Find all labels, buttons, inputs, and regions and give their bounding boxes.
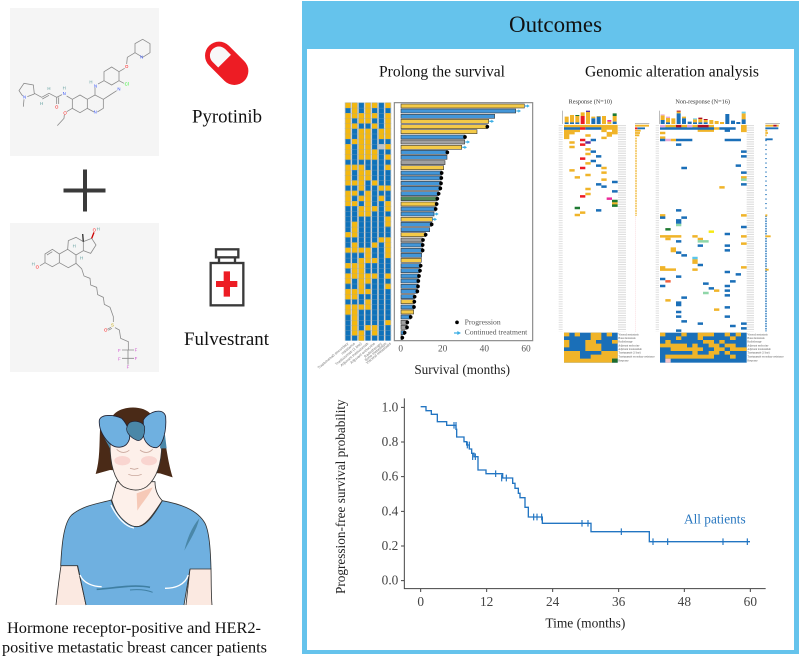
- panel: fulvestrant chemical structure: H: [97, 227, 100, 232]
- panel: fulvestrant chemical structure: F: [135, 356, 138, 361]
- heading: Genomic alteration analysis: Genomic alteration analysis: [585, 64, 759, 80]
- axis title: Survival (months): [414, 362, 510, 377]
- heading: Prolong the survival: Prolong the survival: [379, 64, 505, 80]
- heatmap column labels: resistance: [341, 342, 356, 355]
- chart: Kaplan-Meier progression-free survival: [333, 398, 766, 631]
- panel: pyrotinib chemical structure: N: [94, 110, 97, 115]
- heatmap column labels: Bone metastasis: [364, 342, 387, 362]
- heatmap column labels: Visceral metastasis: [365, 342, 392, 365]
- icon: pill: [199, 36, 254, 91]
- clinical track labels: Adjuvant endocrine: [618, 344, 640, 347]
- heatmap column labels: Adjuvant endocrine: [349, 342, 376, 365]
- clinical track labels: Visceral metastasis: [747, 333, 768, 336]
- response clinical annotation tracks: [564, 333, 618, 363]
- clinical track labels: Trastuzumab (1 line): [618, 352, 641, 355]
- clinical track labels: Visceral metastasis: [618, 333, 639, 336]
- censor marks: [454, 422, 747, 545]
- heatmap column labels: Adjuvant trastuzumab: [340, 342, 369, 368]
- panel: pyrotinib chemical structure: H: [40, 101, 43, 106]
- panel: pyrotinib chemical structure: N: [63, 91, 66, 96]
- x tick labels: 24: [546, 594, 560, 609]
- response mutation frequency: [635, 123, 649, 216]
- y tick labels: 1.0: [382, 399, 399, 414]
- axis tick labels: [398, 344, 531, 354]
- caption: patient population: positive metastatic breast cancer patients: [2, 638, 267, 656]
- panel: fulvestrant chemical structure: F: [135, 347, 138, 352]
- clinical track labels: Adjuvant trastuzumab: [747, 348, 772, 351]
- subheading: Response: Response (N=10): [569, 98, 612, 105]
- panel: pyrotinib chemical structure: N: [117, 87, 120, 92]
- panel: fulvestrant chemical structure: S: [111, 323, 114, 328]
- panel: fulvestrant chemical structure: O: [93, 228, 97, 233]
- legend: Continued treatment: [465, 327, 528, 336]
- heatmap column labels: Radiotherapy: [363, 342, 383, 359]
- clinical track labels: Radiotherapy: [747, 341, 762, 344]
- panel: pyrotinib chemical structure: H: [47, 86, 50, 91]
- panel: fulvestrant chemical structure: F: [118, 357, 121, 362]
- panel: pyrotinib chemical structure: O: [63, 110, 67, 115]
- y tick labels: 0.8: [382, 434, 399, 449]
- placeholder marks for illegible gene labels: [561, 125, 750, 331]
- x tick labels: 0: [417, 594, 424, 609]
- survival curve: [421, 407, 750, 542]
- label: Pyrotinib: Pyrotinib: [192, 106, 262, 128]
- clinical track labels: Response: [747, 359, 758, 362]
- illustration: patient with highlighted reproductive organs: [56, 407, 212, 605]
- non-response mutation matrix: [660, 126, 747, 331]
- clinical track labels: [618, 333, 784, 362]
- clinical track labels: Bone metastasis: [747, 337, 765, 340]
- bars: [401, 104, 524, 340]
- response mutation matrix: [564, 126, 618, 215]
- icon: medicine vial: [211, 249, 243, 305]
- panel: pyrotinib chemical structure: H: [89, 79, 92, 84]
- axes: [401, 398, 766, 592]
- heatmap: clinical features per patient: [317, 103, 392, 370]
- x tick labels: 36: [612, 594, 626, 609]
- heatmap column labels: Trastuzumab (1 line): [334, 342, 363, 366]
- panel: pyrotinib chemical structure: N: [23, 95, 26, 100]
- x tick labels: 60: [744, 594, 757, 609]
- heatmap column labels: [317, 342, 392, 370]
- x tick labels: 48: [678, 594, 691, 609]
- axis tick labels: 0: [398, 344, 403, 354]
- axis tick labels: 60: [521, 344, 531, 354]
- non-response top bar chart: [659, 111, 744, 124]
- clinical track labels: Response: [618, 359, 629, 362]
- panel: fulvestrant chemical structure: O: [36, 264, 40, 269]
- y tick labels: 0.4: [382, 503, 399, 518]
- heatmap column labels: Trastuzumab secondary: [317, 342, 349, 370]
- panel: pyrotinib chemical structure: Cl: [125, 82, 129, 87]
- axis tick labels: 40: [480, 344, 489, 354]
- panel: fulvestrant chemical structure: [10, 223, 159, 372]
- continued treatment arrows: [432, 104, 530, 221]
- caption: patient population: Hormone receptor-positive and HER2-: [7, 618, 261, 637]
- clinical track labels: Bone metastasis: [618, 337, 636, 340]
- panel: fulvestrant chemical structure: F: [127, 364, 130, 369]
- y tick labels: 0.6: [382, 469, 399, 484]
- panel: fulvestrant chemical structure: F: [118, 348, 121, 353]
- panel: pyrotinib chemical structure: O: [125, 64, 129, 69]
- label: Fulvestrant: Fulvestrant: [184, 329, 270, 350]
- subheading: Non-response: Non-response (N=16): [675, 98, 730, 105]
- legend: [454, 317, 528, 336]
- clinical track labels: Trastuzumab (1 line): [747, 352, 770, 355]
- axis tick labels: 20: [438, 344, 448, 354]
- heading: Outcomes: Outcomes: [509, 12, 602, 37]
- chart: genomic alteration oncoplots: [561, 98, 784, 363]
- panel: fulvestrant chemical structure: H: [80, 255, 83, 260]
- clinical track labels: Adjuvant trastuzumab: [618, 348, 643, 351]
- clinical track labels: Radiotherapy: [618, 341, 633, 344]
- panel: fulvestrant chemical structure: H: [73, 243, 76, 248]
- y tick labels: 0.0: [382, 573, 399, 588]
- panel: pyrotinib chemical structure: H: [63, 85, 66, 90]
- y tick labels: [382, 399, 399, 588]
- x tick labels: [417, 594, 757, 609]
- non-response mutation frequency: [765, 123, 780, 331]
- panel: pyrotinib chemical structure: N: [94, 83, 97, 88]
- clinical track labels: Adjuvant endocrine: [747, 344, 769, 347]
- caption: patient population: [2, 618, 267, 656]
- panel: outcomes frame: [302, 1, 799, 654]
- non-response clinical annotation tracks: [660, 333, 747, 363]
- clinical track labels: Trastuzumab secondary resistance: [747, 355, 784, 358]
- y tick labels: 0.2: [382, 538, 398, 553]
- clinical track labels: Trastuzumab secondary resistance: [618, 355, 655, 358]
- panel: pyrotinib chemical structure: N: [140, 54, 143, 59]
- panel: pyrotinib chemical structure: O: [55, 105, 59, 110]
- legend: Progression: [465, 317, 501, 326]
- curve label: All patients: [684, 511, 746, 526]
- panel: fulvestrant chemical structure: O: [104, 328, 108, 333]
- axis title: survival probability: Progression-free survival probability: [333, 399, 348, 594]
- panel: fulvestrant chemical structure: H: [32, 261, 35, 266]
- panel: pyrotinib chemical structure: [10, 8, 159, 156]
- response top bar chart: [563, 111, 615, 124]
- axis title: time: Time (months): [545, 616, 625, 631]
- chart: survival swimmer bar chart: [394, 103, 533, 377]
- icon: plus sign: [64, 170, 106, 212]
- x tick labels: 12: [480, 594, 493, 609]
- progression dots: [400, 125, 489, 339]
